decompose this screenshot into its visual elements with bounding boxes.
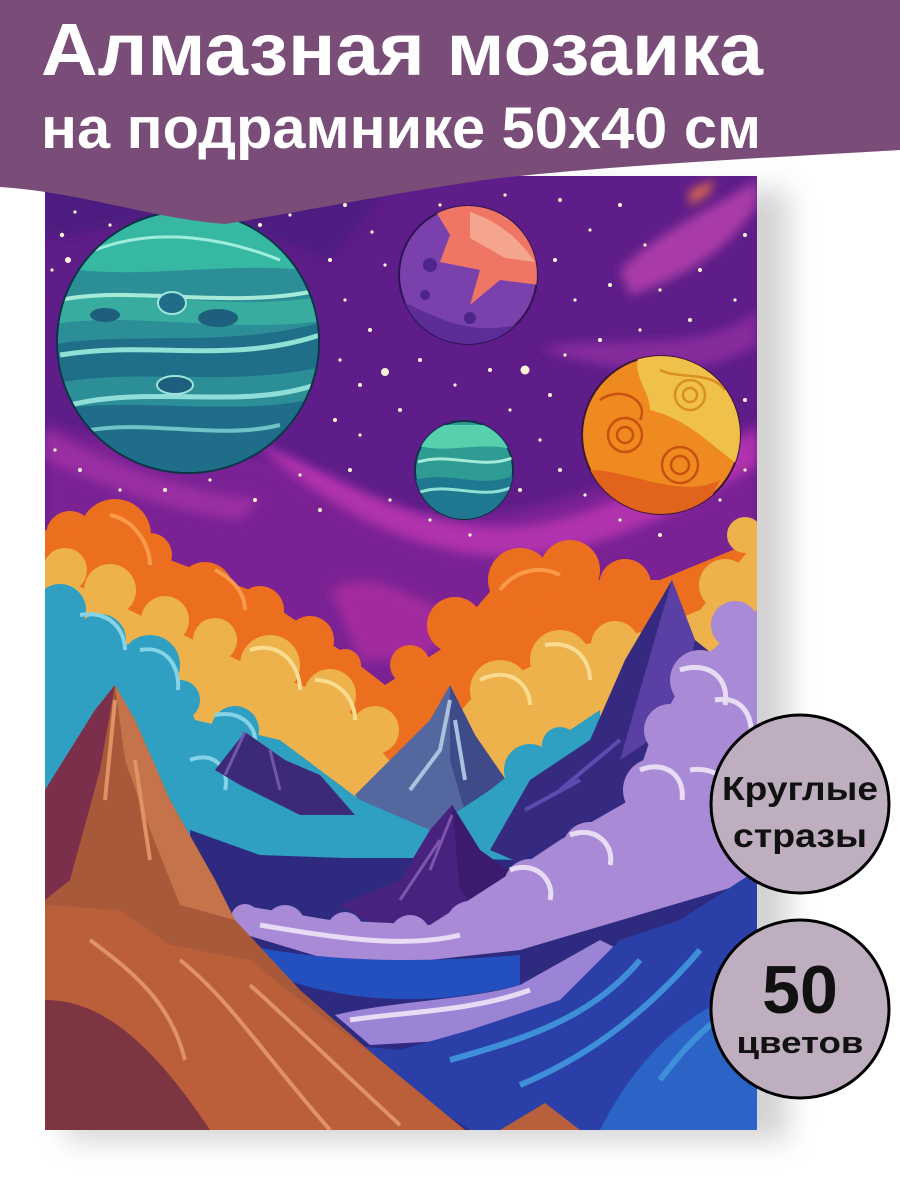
mountain: grey-blue peak bbox=[355, 685, 506, 830]
badge: 50 colours: цветов bbox=[736, 1025, 864, 1060]
clouds: yellow layer bbox=[45, 517, 757, 798]
badge: round rhinestones bbox=[711, 715, 889, 893]
clouds: orange layer bbox=[45, 499, 747, 761]
title: Алмазная мозаика bbox=[41, 8, 764, 91]
badge: 50 colours bbox=[711, 920, 889, 1098]
waves: royal blue band bbox=[261, 948, 520, 1000]
valley: dark blue band bbox=[190, 830, 727, 1130]
title: на подрамнике 50х40 см bbox=[41, 96, 761, 161]
badge: 50 colours: 50 bbox=[762, 952, 838, 1028]
painting: space landscape bbox=[34, 170, 767, 1130]
waves: blue foreground bbox=[345, 870, 757, 1130]
canvas drop shadow bbox=[66, 190, 788, 1140]
planet: purple and coral bbox=[398, 205, 540, 350]
clouds: blue layer bbox=[34, 584, 600, 860]
mountain: large right peak bbox=[490, 580, 710, 860]
night sky bbox=[45, 176, 757, 685]
planet: small teal bbox=[414, 420, 515, 520]
stars bbox=[50, 193, 747, 537]
planet: orange bbox=[581, 350, 745, 520]
planet: large teal bbox=[50, 210, 330, 480]
mountain: foreground brown bbox=[45, 685, 465, 1130]
badge: round rhinestones: Круглые bbox=[722, 770, 878, 807]
clouds: lower lilac strip bbox=[335, 940, 640, 1045]
mountain: dark purple left bbox=[215, 732, 355, 815]
title bbox=[41, 8, 764, 161]
clouds: lilac layer bbox=[230, 601, 767, 960]
mountain: central purple bbox=[340, 805, 508, 925]
banner background bbox=[0, 0, 900, 224]
badge: round rhinestones: стразы bbox=[733, 817, 867, 854]
